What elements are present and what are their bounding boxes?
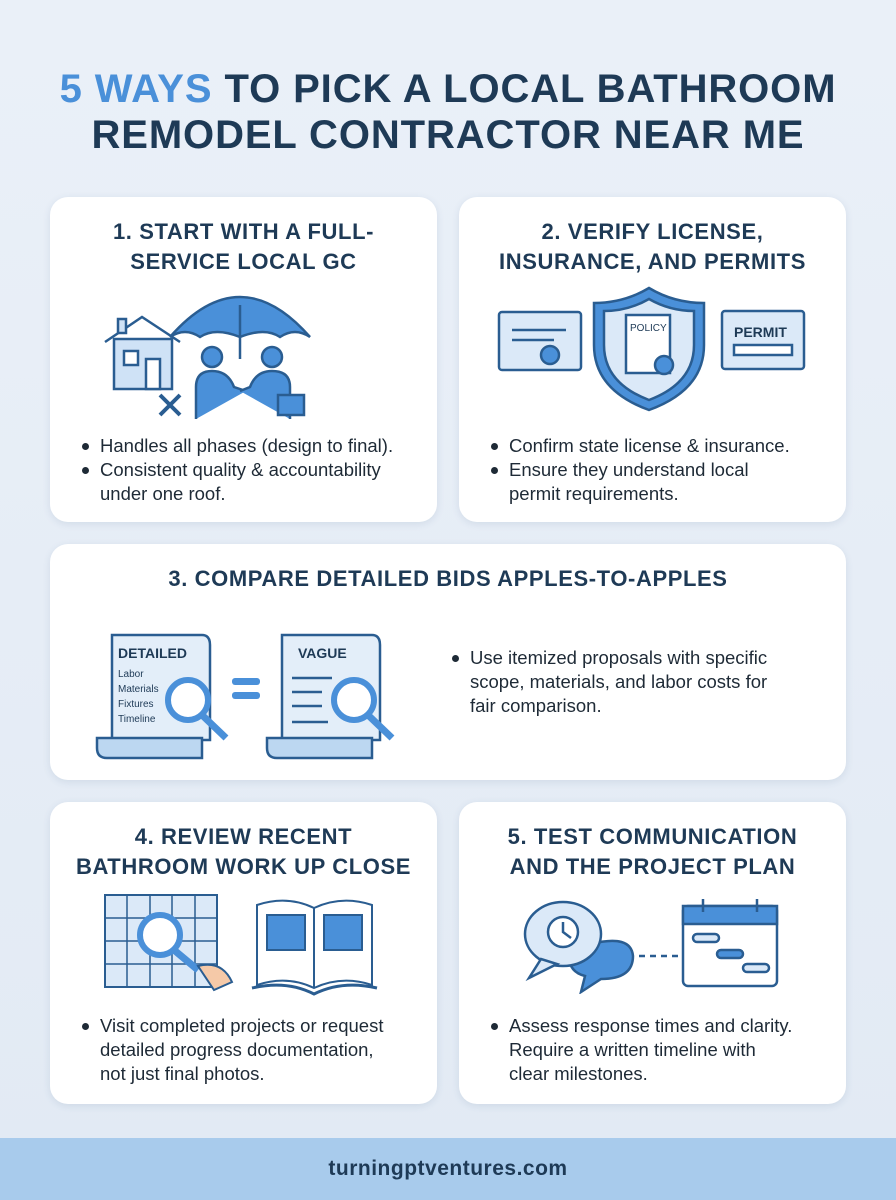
icon: tile grid and photo book (104, 894, 378, 996)
heading 5: AND THE PROJECT PLAN (510, 854, 795, 879)
heading 5: 5. TEST COMMUNICATION (508, 824, 797, 849)
icon: detailed vs vague documents: DETAILED (118, 645, 187, 661)
icon: detailed vs vague documents: Materials (118, 684, 159, 695)
bullets 5: Assess response times and clarity. Require a written timeline with clear milestones. (509, 1015, 792, 1084)
heading 1: SERVICE LOCAL GC (130, 249, 357, 274)
icon: detailed vs vague documents: Timeline (118, 714, 156, 725)
footer (0, 1138, 896, 1200)
icon: detailed vs vague documents: VAGUE (298, 645, 347, 661)
bullets 1: Handles all phases (design to final). (100, 435, 393, 456)
panel: 5 communication (459, 802, 846, 1104)
heading 5 (508, 824, 797, 879)
icon: certificate, shield, permit: POLICY (630, 323, 667, 334)
heading 4: BATHROOM WORK UP CLOSE (76, 854, 411, 879)
panel: 2 license (459, 197, 846, 522)
heading 4: 4. REVIEW RECENT (135, 824, 352, 849)
heading 4 (76, 824, 411, 879)
icon: house, umbrella, handshake (104, 296, 311, 419)
icon: chat bubbles and calendar (524, 899, 778, 994)
heading 1: 1. START WITH A FULL- (113, 219, 374, 244)
bullets 1: Consistent quality & accountability under one roof. (100, 459, 381, 504)
heading 1 (113, 219, 374, 274)
heading 3: 3. COMPARE DETAILED BIDS APPLES-TO-APPLES (168, 566, 728, 591)
icon: detailed vs vague documents: Labor (118, 669, 144, 680)
bullets 4: Visit completed projects or request detailed progress documentation, not just final photos. (100, 1015, 383, 1084)
panel: 1 full-service GC (50, 197, 437, 522)
icon: detailed vs vague documents (96, 634, 394, 760)
heading 2: 2. VERIFY LICENSE, (542, 219, 763, 244)
title: 5 WAYS TO PICK A LOCAL BATHROOM (60, 67, 836, 111)
icon: detailed vs vague documents: Fixtures (118, 699, 154, 710)
title (60, 67, 836, 157)
heading 2: INSURANCE, AND PERMITS (499, 249, 806, 274)
bullets 2 (491, 435, 790, 504)
panel: 4 review work (50, 802, 437, 1104)
bullets 1 (82, 435, 393, 504)
heading 2 (499, 219, 806, 274)
icon: certificate, shield, permit (498, 286, 806, 412)
icon: certificate, shield, permit: PERMIT (734, 324, 787, 340)
footer: turningptventures.com (328, 1157, 568, 1180)
bullets 2: Confirm state license & insurance. (509, 435, 790, 456)
panel: 3 compare bids (50, 544, 846, 780)
bullets 3: Use itemized proposals with specific scope, materials, and labor costs for fair comparison. (470, 647, 767, 716)
title: REMODEL CONTRACTOR NEAR ME (91, 113, 805, 157)
bullets 2: Ensure they understand local permit requirements. (509, 459, 749, 504)
